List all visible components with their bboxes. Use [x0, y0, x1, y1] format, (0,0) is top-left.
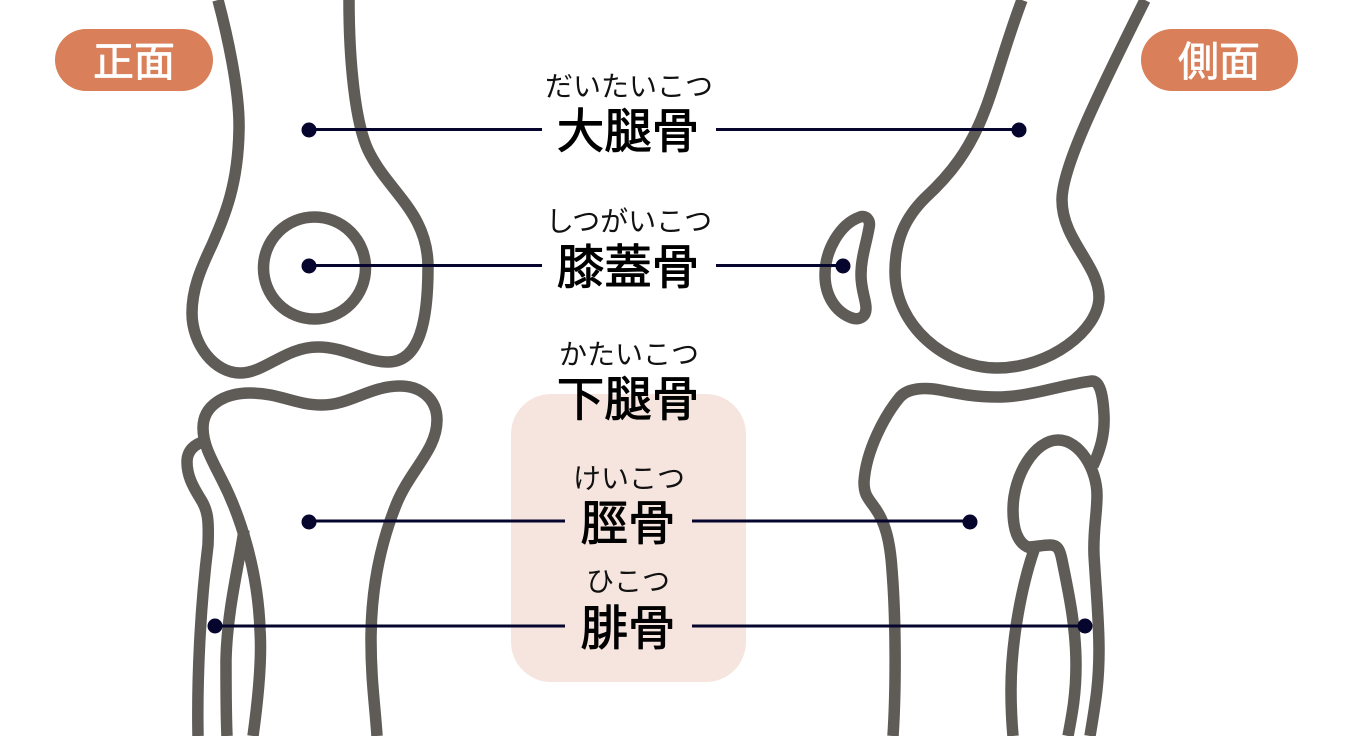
panel: highlight behind lower leg bones: [511, 394, 746, 682]
side view knee bones: [825, 0, 1145, 736]
label: patella: しつがいこつ: [546, 206, 712, 237]
label: fibula: ひこつ: [586, 566, 670, 597]
front fibula inner edge: [226, 530, 244, 736]
side fibula outer edge: [1013, 440, 1099, 736]
label: femur: 大腿骨: [557, 106, 699, 159]
label: femur: [545, 71, 713, 159]
leader lines: patella: [302, 258, 850, 274]
front fibula outer edge: [187, 441, 208, 736]
badge: side view: [1141, 29, 1298, 91]
label: lower leg bones: 下腿骨: [557, 374, 699, 427]
front tibia outline: [203, 386, 437, 736]
leader lines: tibia: [302, 514, 978, 530]
badge: front view: [55, 29, 213, 91]
label: lower leg bones: かたいこつ: [559, 339, 699, 370]
side fibula inner right edge: [1028, 545, 1076, 736]
label: patella: [546, 206, 712, 295]
label: fibula: [580, 566, 676, 656]
front patella circle: [264, 217, 366, 319]
label: tibia: けいこつ: [573, 463, 685, 494]
front view knee bones: [187, 0, 437, 736]
label: femur: だいたいこつ: [545, 71, 713, 102]
side patella: [825, 217, 869, 319]
badge: front view: 正面: [93, 39, 175, 85]
label: fibula: 腓骨: [580, 603, 676, 656]
label: tibia: [573, 463, 685, 551]
side femur outline: [895, 0, 1145, 368]
leader lines: femur: [302, 122, 1026, 138]
label: lower leg bones: [557, 339, 699, 427]
leader lines: fibula: [208, 618, 1092, 634]
label: tibia: 脛骨: [580, 498, 676, 551]
side tibia outline: [864, 381, 1104, 736]
front femur outline: [192, 0, 428, 373]
side fibula inner left edge: [1011, 550, 1034, 736]
label: patella: 膝蓋骨: [557, 242, 699, 295]
badge: side view: 側面: [1178, 39, 1260, 85]
